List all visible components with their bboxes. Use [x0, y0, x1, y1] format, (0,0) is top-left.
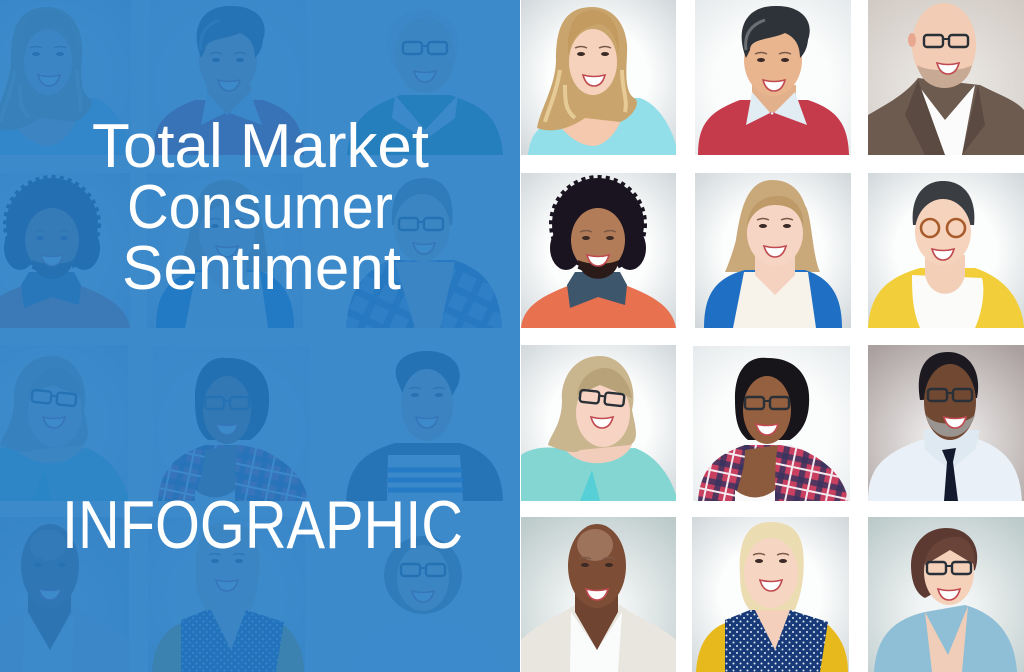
portrait: woman with black bob and plaid shirt	[693, 346, 850, 501]
portrait: woman with orange glasses and yellow cardigan	[868, 173, 1024, 328]
ghost portrait: woman in plaid with glasses	[158, 358, 308, 501]
ghost portrait: man in sweater	[150, 0, 306, 155]
portrait: bald man in brown jacket	[868, 0, 1024, 155]
ghost portrait: man with afro	[0, 173, 130, 328]
ghost portrait: blonde woman in polka dots	[148, 517, 305, 672]
title line 2: Consumer	[127, 173, 393, 242]
ghost portrait: curly-haired woman with glasses	[384, 536, 462, 614]
ghost portrait: young man in striped shirt	[346, 351, 503, 501]
subtitle: INFOGRAPHIC: INFOGRAPHIC	[62, 487, 463, 563]
portrait: blonde woman in polka dots and yellow cardigan	[692, 517, 849, 672]
portrait: older woman with glasses and aqua blouse	[521, 345, 676, 501]
ghost portrait: man in green sweater	[347, 40, 503, 155]
blue overlay	[0, 0, 520, 672]
title	[92, 112, 429, 303]
title line 1: Total Market	[92, 112, 429, 181]
portrait: man in red sweater	[695, 0, 851, 155]
ghost portrait: blonde woman in cardigan	[156, 180, 294, 328]
title line 3: Sentiment	[122, 234, 401, 303]
panel: blue title panel with ghost portraits	[0, 0, 520, 672]
portrait: blonde woman in blue cardigan	[695, 173, 851, 328]
portrait: woman with brown hair, glasses and denim jacket	[868, 517, 1024, 672]
portrait: bald man in cream jacket	[521, 517, 676, 672]
ghost portrait: woman with glasses and fringe	[0, 345, 128, 501]
portrait: man with grey beard, white shirt and black tie	[868, 345, 1024, 501]
portrait: man with afro and orange sweater	[521, 173, 676, 328]
ghost portrait: woman with wavy hair	[0, 0, 131, 155]
ghost portrait: bald man in white jacket	[21, 524, 79, 650]
ghost portrait: woman in plaid shirt	[346, 178, 502, 328]
portrait: blonde woman in aqua top	[521, 0, 676, 155]
